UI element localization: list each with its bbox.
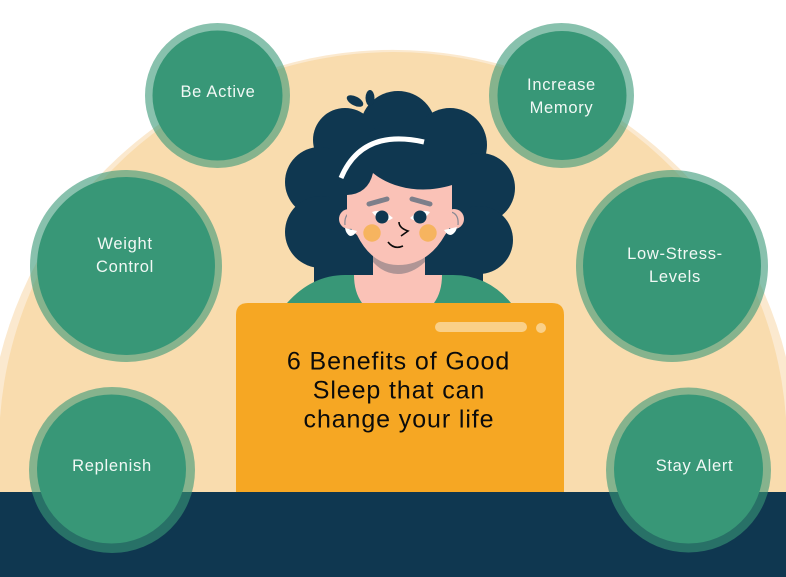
neck shadow [373,255,425,274]
circle: Be Active [145,23,290,168]
eyebrows [369,199,430,204]
shirt [287,275,511,303]
nose and mouth [388,222,408,247]
title card [236,303,564,492]
title: 6 Benefits of Good [287,348,510,376]
title line 3: change your life [304,406,494,434]
cheeks [363,224,437,242]
card pill [435,322,527,332]
earrings [345,227,457,236]
circle: Increase Memory [489,23,634,168]
circle: Low-Stress-Levels: Low-Stress- [627,245,723,263]
circle: Replenish: Replenish [72,457,152,475]
circle: Stay Alert: Stay Alert [656,457,733,475]
eyes [372,210,430,224]
circle: Weight Control: Control [96,258,154,276]
circle: Low-Stress-Levels: Levels [649,268,701,286]
circle: Low-Stress-Levels [576,170,768,362]
circle: Stay Alert [606,388,771,552]
neck and chest [354,250,442,303]
circle: Weight Control: Weight [97,235,153,253]
card dot [536,323,546,333]
face [347,173,452,265]
circle: Weight Control [30,170,222,362]
hair [285,90,515,300]
circle: Replenish [29,387,195,553]
circle: Increase Memory: Increase [527,76,596,94]
character illustration [285,90,515,303]
headband [341,139,424,178]
ears [339,209,464,229]
circle: Increase Memory: Memory [530,99,593,117]
title line 2: Sleep that can [313,376,485,404]
floor band [0,492,786,577]
circle: Be Active: Be Active [180,83,256,101]
background arch [0,50,786,492]
ear lines [345,212,458,225]
